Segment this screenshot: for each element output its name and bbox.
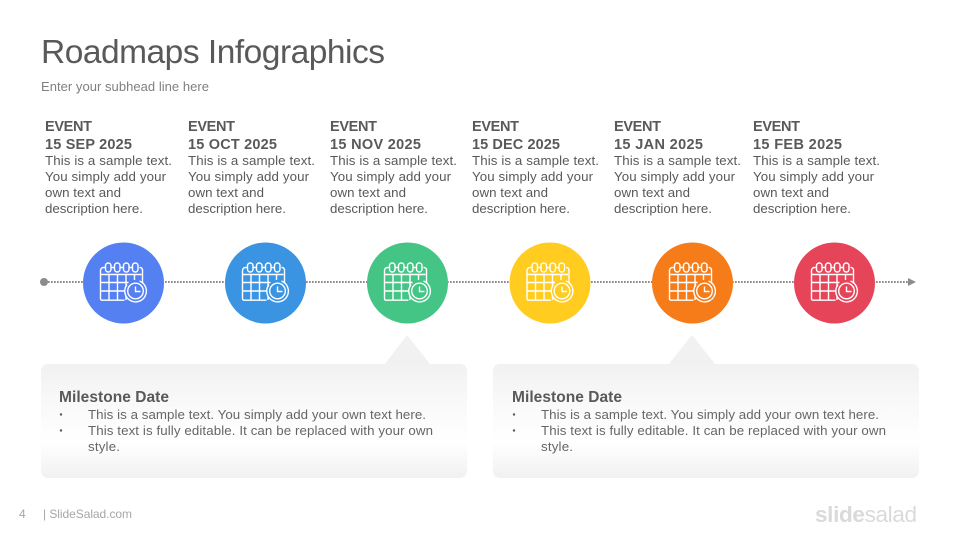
milestone 4 circle bbox=[510, 242, 590, 324]
event 1 text: 15 SEP 2025 bbox=[45, 137, 132, 153]
event 2 text: EVENT bbox=[188, 119, 235, 135]
panel bullet list: This is a sample text. You simply add your own text here. bbox=[88, 407, 426, 422]
event text blocks bbox=[45, 119, 880, 216]
event 5 text: description here. bbox=[614, 201, 712, 216]
event 2 text: This is a sample text. bbox=[188, 153, 315, 168]
event 4 text: 15 DEC 2025 bbox=[472, 137, 560, 153]
event 1 text: own text and bbox=[45, 185, 121, 200]
event 4 text bbox=[472, 119, 599, 216]
event 2 text: You simply add your bbox=[188, 169, 310, 184]
event 3 text: description here. bbox=[330, 201, 428, 216]
icon: calendar clock bbox=[670, 263, 715, 302]
event 3 text: 15 NOV 2025 bbox=[330, 137, 421, 153]
title: Roadmaps Infographics bbox=[41, 34, 385, 71]
event 2 text: description here. bbox=[188, 201, 286, 216]
icon: calendar clock bbox=[527, 263, 573, 302]
panel heading: Milestone Date bbox=[59, 389, 169, 406]
event 4 text: description here. bbox=[472, 201, 570, 216]
milestone 5 circle bbox=[652, 242, 733, 324]
event 6 text bbox=[753, 119, 880, 216]
panel bullet list bbox=[60, 407, 433, 454]
event 3 text: This is a sample text. bbox=[330, 153, 457, 168]
event 4 text: You simply add your bbox=[472, 169, 594, 184]
event 4 text: This is a sample text. bbox=[472, 153, 599, 168]
event 6 text: This is a sample text. bbox=[753, 153, 880, 168]
icon: calendar clock bbox=[242, 263, 288, 302]
event 5 text: You simply add your bbox=[614, 169, 736, 184]
milestone 2 circle bbox=[225, 242, 306, 324]
event 3 text bbox=[330, 119, 457, 216]
event 2 text bbox=[188, 119, 315, 216]
event 3 text: EVENT bbox=[330, 119, 377, 135]
panel heading: Milestone Date bbox=[512, 389, 622, 406]
event 6 text: You simply add your bbox=[753, 169, 875, 184]
event 1 text: This is a sample text. bbox=[45, 153, 172, 168]
subhead: Enter your subhead line here bbox=[41, 79, 209, 94]
event 6 text: 15 FEB 2025 bbox=[753, 137, 842, 153]
event 2 text: own text and bbox=[188, 185, 264, 200]
event 2 text: 15 OCT 2025 bbox=[188, 137, 277, 153]
event 6 text: description here. bbox=[753, 201, 851, 216]
event 1 text: You simply add your bbox=[45, 169, 167, 184]
event 6 text: own text and bbox=[753, 185, 829, 200]
panel bullet list: style. bbox=[541, 439, 573, 454]
event 1 text bbox=[45, 119, 172, 216]
event 5 text: This is a sample text. bbox=[614, 153, 741, 168]
panel bullet list: style. bbox=[88, 439, 120, 454]
event 4 text: EVENT bbox=[472, 119, 519, 135]
event 5 text: own text and bbox=[614, 185, 690, 200]
event 1 text: EVENT bbox=[45, 119, 92, 135]
event 4 text: own text and bbox=[472, 185, 548, 200]
event 3 text: own text and bbox=[330, 185, 406, 200]
panel bullet list: This is a sample text. You simply add your own text here. bbox=[541, 407, 879, 422]
icon: calendar clock bbox=[100, 263, 146, 302]
panel bullet list bbox=[513, 407, 886, 454]
event 6 text: EVENT bbox=[753, 119, 800, 135]
icon: calendar clock bbox=[384, 263, 430, 302]
icon: calendar clock bbox=[812, 263, 857, 302]
event 3 text: You simply add your bbox=[330, 169, 452, 184]
milestone 1 circle bbox=[83, 242, 164, 324]
event 5 text bbox=[614, 119, 741, 216]
milestone 3 circle bbox=[367, 242, 448, 324]
event 5 text: EVENT bbox=[614, 119, 661, 135]
footer site name: | SlideSalad.com bbox=[43, 507, 132, 521]
panel: milestone date left bbox=[41, 335, 467, 478]
event 1 text: description here. bbox=[45, 201, 143, 216]
logo wordmark: slidesalad bbox=[815, 502, 917, 527]
panel bullet list: This text is fully editable. It can be replaced with your own bbox=[88, 423, 433, 438]
panel bullet list: This text is fully editable. It can be replaced with your own bbox=[541, 423, 886, 438]
event 5 text: 15 JAN 2025 bbox=[614, 137, 703, 153]
milestone 6 circle bbox=[794, 242, 875, 324]
timeline arrow bbox=[40, 278, 916, 286]
page number: 4 bbox=[19, 507, 26, 521]
panel: milestone date right bbox=[493, 335, 919, 478]
